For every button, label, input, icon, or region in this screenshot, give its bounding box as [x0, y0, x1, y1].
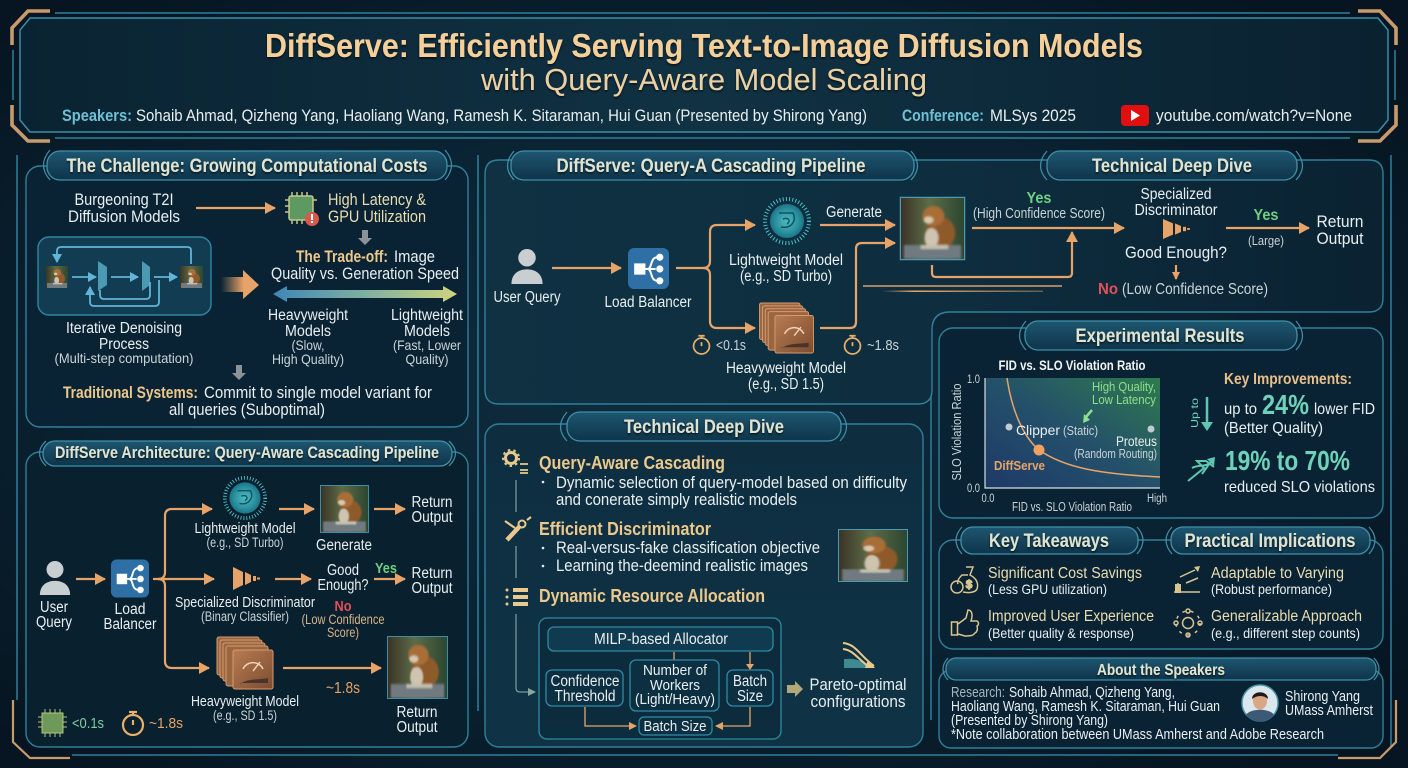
heading: About the Speakers [1097, 662, 1225, 679]
text: heavyweight model [726, 360, 846, 393]
implication: adaptable [1211, 565, 1344, 597]
confidence threshold [546, 670, 623, 706]
text: research team: Sohaib Ahmad, Qizheng Yang, [1009, 685, 1175, 701]
chart: fid vs slo: 1.0 [967, 374, 980, 386]
arrow [552, 267, 621, 269]
arrow: grey down [232, 365, 246, 380]
label: generate: Generate [826, 204, 882, 221]
icon: discriminator [233, 567, 260, 590]
chart: fid vs slo: (Random Routing) [1074, 447, 1157, 461]
stat: 24 percent: up to [1224, 401, 1257, 418]
heading: Technical Deep Dive [624, 416, 784, 438]
connectors to batch size [585, 707, 750, 726]
section: efficient discriminator: Efficient Discriminator [539, 518, 711, 539]
panel: about the speakers [939, 658, 1383, 748]
text: research team: (Presented by Shirong Yang) [951, 713, 1108, 729]
takeaway: user experience [988, 608, 1154, 641]
icon: gear [503, 450, 528, 473]
number of workers: Number of [643, 662, 708, 679]
panel: takeaways and implications [939, 527, 1383, 649]
section: query-aware cascading: and conerate simply realistic models [556, 491, 797, 509]
section: query-aware cascading: Dynamic selection of query-model based on difficulty [556, 474, 908, 492]
label: no low confidence: No [1098, 281, 1118, 298]
arrow [283, 667, 381, 669]
text: generate: Generate [316, 537, 372, 554]
avatar: shirong yang [1242, 685, 1278, 722]
youtube link [1121, 105, 1352, 126]
image: dog [838, 530, 908, 582]
batch size: Batch [733, 673, 767, 690]
title: DiffServe: Efficiently Serving Text-to-Image Diffusion Models [265, 27, 1143, 64]
text: high latency: High Latency & [328, 190, 427, 209]
section: efficient discriminator: Learning the-deemind realistic images [556, 557, 808, 575]
label: time: ~1.8s [326, 680, 360, 697]
speaker name: UMass Amherst [1285, 703, 1373, 719]
implication: adaptable: Adaptable to Varying [1211, 565, 1344, 582]
label: lightweight: Models [404, 323, 450, 340]
heading [560, 412, 846, 441]
label: no: No [334, 599, 352, 615]
text: return output: Output [396, 719, 438, 736]
youtube link: youtube.com/watch?v=None [1156, 107, 1352, 125]
text: burgeoning: Burgeoning T2I [74, 190, 174, 209]
icon: network [1174, 609, 1202, 637]
timer: light [694, 336, 746, 354]
icon: pareto [843, 643, 875, 668]
text: heavyweight model: Heavyweight Model [191, 694, 299, 710]
user query [494, 249, 561, 306]
text: specialized discriminator: Discriminator [1134, 202, 1218, 219]
label: heavyweight: High Quality) [272, 351, 344, 367]
label: yes target: (Large) [1248, 234, 1284, 248]
text: return output: Return [412, 494, 452, 511]
text: high latency [328, 190, 427, 226]
user query: Query [36, 614, 72, 631]
batch size: Size [737, 688, 763, 705]
allocator box [539, 618, 781, 739]
user query: User Query [494, 289, 561, 306]
label: yes target [1248, 207, 1284, 248]
icon: wrench [505, 517, 531, 540]
text: lightweight model: (e.g., SD Turbo) [740, 268, 832, 285]
text: iterative denoising: Process [99, 336, 149, 353]
text: research team: Haoliang Wang, Ramesh K. Sitaraman, Hui Guan [951, 699, 1220, 715]
stat: 24 percent: lower FID [1314, 401, 1375, 418]
arrow [279, 508, 314, 510]
text: heavyweight model [191, 694, 299, 723]
milp allocator [548, 627, 773, 651]
text: heavyweight model: (e.g., SD 1.5) [748, 376, 824, 393]
text: return output: Return [1316, 212, 1364, 231]
text: lightweight model: Lightweight Model [729, 252, 843, 269]
arrow: down [1175, 265, 1177, 279]
arrow [196, 207, 275, 209]
label: heavyweight [268, 307, 349, 367]
heading: architecture [40, 441, 456, 466]
takeaway: cost savings: Significant Cost Savings [988, 565, 1142, 582]
icon: down arrow: Up to [1189, 398, 1201, 428]
arrowhead [746, 664, 754, 670]
icon: thumbs up [952, 610, 978, 636]
label: heavyweight: Heavyweight [268, 307, 349, 324]
load balancer [104, 560, 156, 633]
chart: fid vs slo: 0.0 [967, 483, 980, 495]
user query: User [40, 599, 68, 616]
panel: the challenge [26, 150, 468, 427]
heading: the challenge [44, 150, 452, 180]
text: good enough [318, 562, 369, 594]
batch size output: Batch Size [644, 718, 706, 735]
text: return output: Return [396, 704, 438, 721]
section: query-aware cascading [539, 452, 908, 509]
label: no: (Low Confidence [302, 612, 384, 627]
heading: key takeaways: Key Takeaways [989, 530, 1109, 552]
heading: Experimental Results [1076, 325, 1245, 347]
chart: fid vs slo: DiffServe [994, 458, 1045, 473]
chart: fid vs slo: High [1147, 493, 1167, 505]
arrow [275, 578, 311, 580]
legend: timer time: ~1.8s [149, 715, 183, 732]
text: iterative denoising [54, 320, 194, 366]
batch size [727, 670, 773, 706]
label: yes high confidence [973, 190, 1105, 222]
load balancer: Load Balancer [604, 294, 692, 311]
chart: fid vs slo: FID vs. SLO Violation Ratio [998, 358, 1146, 373]
legend: chip time [38, 709, 104, 737]
heading [943, 658, 1379, 680]
arrow: trade-off gradient [273, 286, 457, 302]
icon: lightweight model [765, 199, 809, 243]
heading: key improvements: Key Improvements: [1224, 371, 1352, 388]
icon: discriminator [1163, 219, 1190, 239]
text: return output: Output [412, 580, 453, 597]
text: good enough: Enough? [318, 577, 369, 594]
speakers line: Sohaib Ahmad, Qizheng Yang, Haoliang Wang, Ramesh K. Sitaraman, Hui Guan (Presented by Shirong Yang) [136, 107, 867, 125]
heading: technical deep dive [1040, 151, 1302, 180]
icon: adaptable [1174, 566, 1200, 593]
icon: lightweight model [225, 478, 265, 518]
heading: technical deep dive: Technical Deep Dive [1092, 155, 1252, 177]
text: burgeoning: Diffusion Models [68, 207, 180, 226]
connector lines [516, 480, 528, 692]
arrow [1226, 227, 1309, 229]
text: trade-off: Quality vs. Generation Speed [271, 265, 459, 283]
label: heavyweight: (Slow, [292, 337, 324, 353]
arrow: heavy to image [820, 243, 895, 328]
text: pareto-optimal: configurations [810, 693, 906, 711]
heading: pipeline [508, 151, 918, 180]
lines: feedback [863, 232, 1072, 292]
text: return output [412, 494, 453, 526]
section: query-aware cascading: Query-Aware Cascading [539, 452, 725, 473]
text: lightweight model: Lightweight Model [194, 521, 296, 537]
text: burgeoning [68, 190, 180, 226]
branching arrows [153, 509, 214, 668]
text: iterative denoising: (Multi-step computation) [54, 350, 194, 366]
icon: heavyweight stack [760, 303, 813, 353]
chart: fid vs slo: SLO Violation Ratio [950, 383, 964, 480]
number of workers [630, 660, 719, 711]
label: heavyweight: Models [285, 323, 331, 340]
text: return output [412, 565, 453, 597]
conference [902, 107, 1076, 125]
text: lightweight model: (e.g., SD Turbo) [206, 535, 284, 550]
legend: timer time [123, 712, 183, 735]
text: return output: Return [412, 565, 452, 582]
text: heavyweight model: (e.g., SD 1.5) [213, 708, 277, 723]
text: iterative denoising: Iterative Denoising [66, 320, 182, 337]
chart: fid vs slo [950, 358, 1167, 514]
panel: architecture [26, 441, 468, 747]
arrow [76, 578, 105, 580]
speakers line: Speakers: [62, 107, 132, 125]
text: specialized discriminator: Specialized [1140, 186, 1212, 203]
arrow [972, 227, 1124, 229]
icon: money bag [951, 567, 978, 593]
chart: fid vs slo: FID vs. SLO Violation Ratio [1012, 500, 1132, 514]
label: yes high confidence: Yes [1026, 190, 1052, 207]
chart: fid vs slo: 0.0 [982, 493, 994, 505]
heading: pipeline: DiffServe: Query-A Cascading Pipeline [556, 155, 866, 177]
label: yes high confidence: (High Confidence Score) [973, 206, 1105, 222]
label: lightweight: (Fast, Lower [393, 337, 461, 353]
text: traditional systems [63, 384, 432, 419]
takeaway: user experience: Improved User Experience [988, 608, 1154, 625]
text: good enough: Good Enough? [1125, 243, 1227, 262]
text: research team: Research: [951, 685, 1005, 701]
branching arrows [676, 225, 755, 328]
milp allocator: MILP-based Allocator [594, 631, 728, 648]
subtitle: with Query-Aware Model Scaling [480, 62, 927, 97]
takeaway: user experience: (Better quality & response) [988, 625, 1134, 641]
text: specialized discriminator [1134, 186, 1218, 219]
text: high latency: GPU Utilization [328, 207, 426, 226]
speaker name: Shirong Yang [1285, 689, 1360, 705]
stat: 19 to 70 percent: 19% to 70% [1225, 445, 1350, 476]
text: traditional systems: all queries (Suboptimal) [169, 401, 325, 419]
text: pareto-optimal [810, 676, 906, 711]
number of workers: Workers [650, 677, 700, 694]
label: no low confidence: (Low Confidence Score) [1122, 281, 1268, 298]
icon: money bag: $ [966, 579, 972, 591]
arrow: grey down [358, 230, 372, 245]
icon: down arrow [1189, 397, 1213, 431]
panel: technical deep dive lower [485, 412, 923, 747]
conference: MLSys 2025 [990, 107, 1076, 125]
panel: pipeline and deep dive [485, 151, 1383, 404]
text: good enough: Good [327, 562, 359, 579]
label: lightweight [391, 307, 464, 367]
image: heavy output [388, 636, 448, 698]
chart: fid vs slo: Clipper [1016, 422, 1060, 438]
conference: Conference: [902, 107, 984, 125]
connector [674, 652, 750, 666]
text: return output: Output [1316, 229, 1364, 248]
speaker name [1285, 689, 1373, 719]
text: discriminator [175, 595, 315, 624]
number of workers: (Light/Heavy) [635, 691, 715, 708]
arrow: to pareto [787, 681, 803, 697]
diagram: denoising loop [38, 237, 211, 315]
arrow: big orange [221, 270, 259, 299]
chart: fid vs slo: High Quality, [1092, 379, 1156, 394]
implication: adaptable: (Robust performance) [1211, 581, 1332, 597]
text: lightweight model [194, 521, 296, 550]
heading [1020, 321, 1302, 350]
takeaway: cost savings: (Less GPU utilization) [988, 581, 1107, 597]
icon: heavyweight stack [217, 637, 273, 689]
arrow [374, 578, 405, 580]
stat: 19 to 70 percent: reduced SLO violations [1224, 479, 1375, 496]
implication: generalizable: Generalizable Approach [1211, 608, 1362, 625]
user query [36, 561, 72, 631]
confidence threshold: Confidence [550, 673, 620, 690]
header panel [20, 18, 1388, 132]
implication: generalizable [1211, 608, 1362, 641]
text: trade-off [271, 248, 459, 283]
text: trade-off: The Trade-off: [296, 248, 388, 266]
heading: architecture: DiffServe Architecture: Query-Aware Cascading Pipeline [55, 443, 439, 462]
label: lightweight: Lightweight [391, 307, 464, 324]
text: return output [396, 704, 438, 736]
chart: fid vs slo: (Static) [1063, 424, 1098, 438]
icon: trend [1188, 457, 1215, 481]
timer: heavy [845, 336, 899, 354]
takeaway: cost savings [988, 565, 1142, 597]
load balancer: Load [114, 601, 146, 618]
text: return output: Output [412, 509, 453, 526]
chart: fid vs slo: Low Latency [1092, 392, 1156, 407]
label: yes target: Yes [1254, 207, 1279, 224]
text: return output [1316, 212, 1364, 248]
timer: light: <0.1s [716, 338, 746, 354]
panel: experimental results [939, 321, 1383, 518]
image: generated [900, 198, 964, 260]
text: research team: *Note collaboration between UMass Amherst and Adobe Research [951, 727, 1324, 743]
text: traditional systems: Commit to single model variant for [204, 384, 432, 402]
stat: 24 percent: (Better Quality) [1224, 420, 1323, 437]
arrowhead [528, 688, 536, 696]
text: research team [951, 685, 1324, 743]
label: no: Score) [327, 625, 359, 640]
icon: list [506, 588, 528, 606]
label: lightweight: Quality) [406, 351, 448, 367]
text: discriminator: (Binary Classifier) [201, 609, 289, 624]
section: efficient discriminator: Real-versus-fake classification objective [556, 539, 820, 557]
text: pareto-optimal: Pareto-optimal [810, 676, 906, 694]
section: dynamic resource allocation: Dynamic Resource Allocation [539, 585, 765, 606]
label: yes: Yes [375, 561, 397, 577]
heading: the challenge: The Challenge: Growing Computational Costs [66, 155, 428, 177]
implication: generalizable: (e.g., different step counts) [1211, 625, 1360, 641]
image: generated [320, 486, 368, 532]
arrow [374, 508, 405, 510]
label: no [302, 599, 384, 640]
chart: fid vs slo: Proteus [1116, 434, 1157, 449]
text: lightweight model [729, 252, 843, 285]
legend: chip time: <0.1s [72, 715, 104, 732]
stat: 19 to 70 percent [1224, 445, 1375, 496]
arrow [820, 224, 895, 226]
load balancer: Balancer [104, 616, 156, 633]
stat: 24 percent: 24% [1262, 389, 1309, 420]
icon: chip alert [285, 192, 319, 226]
text: traditional systems: Traditional Systems: [63, 384, 198, 402]
load balancer [604, 248, 692, 311]
text: trade-off: Image [394, 248, 435, 266]
timer: heavy: ~1.8s [867, 338, 899, 354]
stat: 24 percent [1224, 389, 1375, 437]
confidence threshold: Threshold [554, 688, 616, 705]
heading: practical implications: Practical Implications [1184, 530, 1356, 552]
heading: key takeaways [956, 527, 1143, 554]
text: discriminator: Specialized Discriminator [175, 595, 315, 611]
section: efficient discriminator [539, 518, 820, 575]
text: heavyweight model: Heavyweight Model [726, 360, 846, 377]
